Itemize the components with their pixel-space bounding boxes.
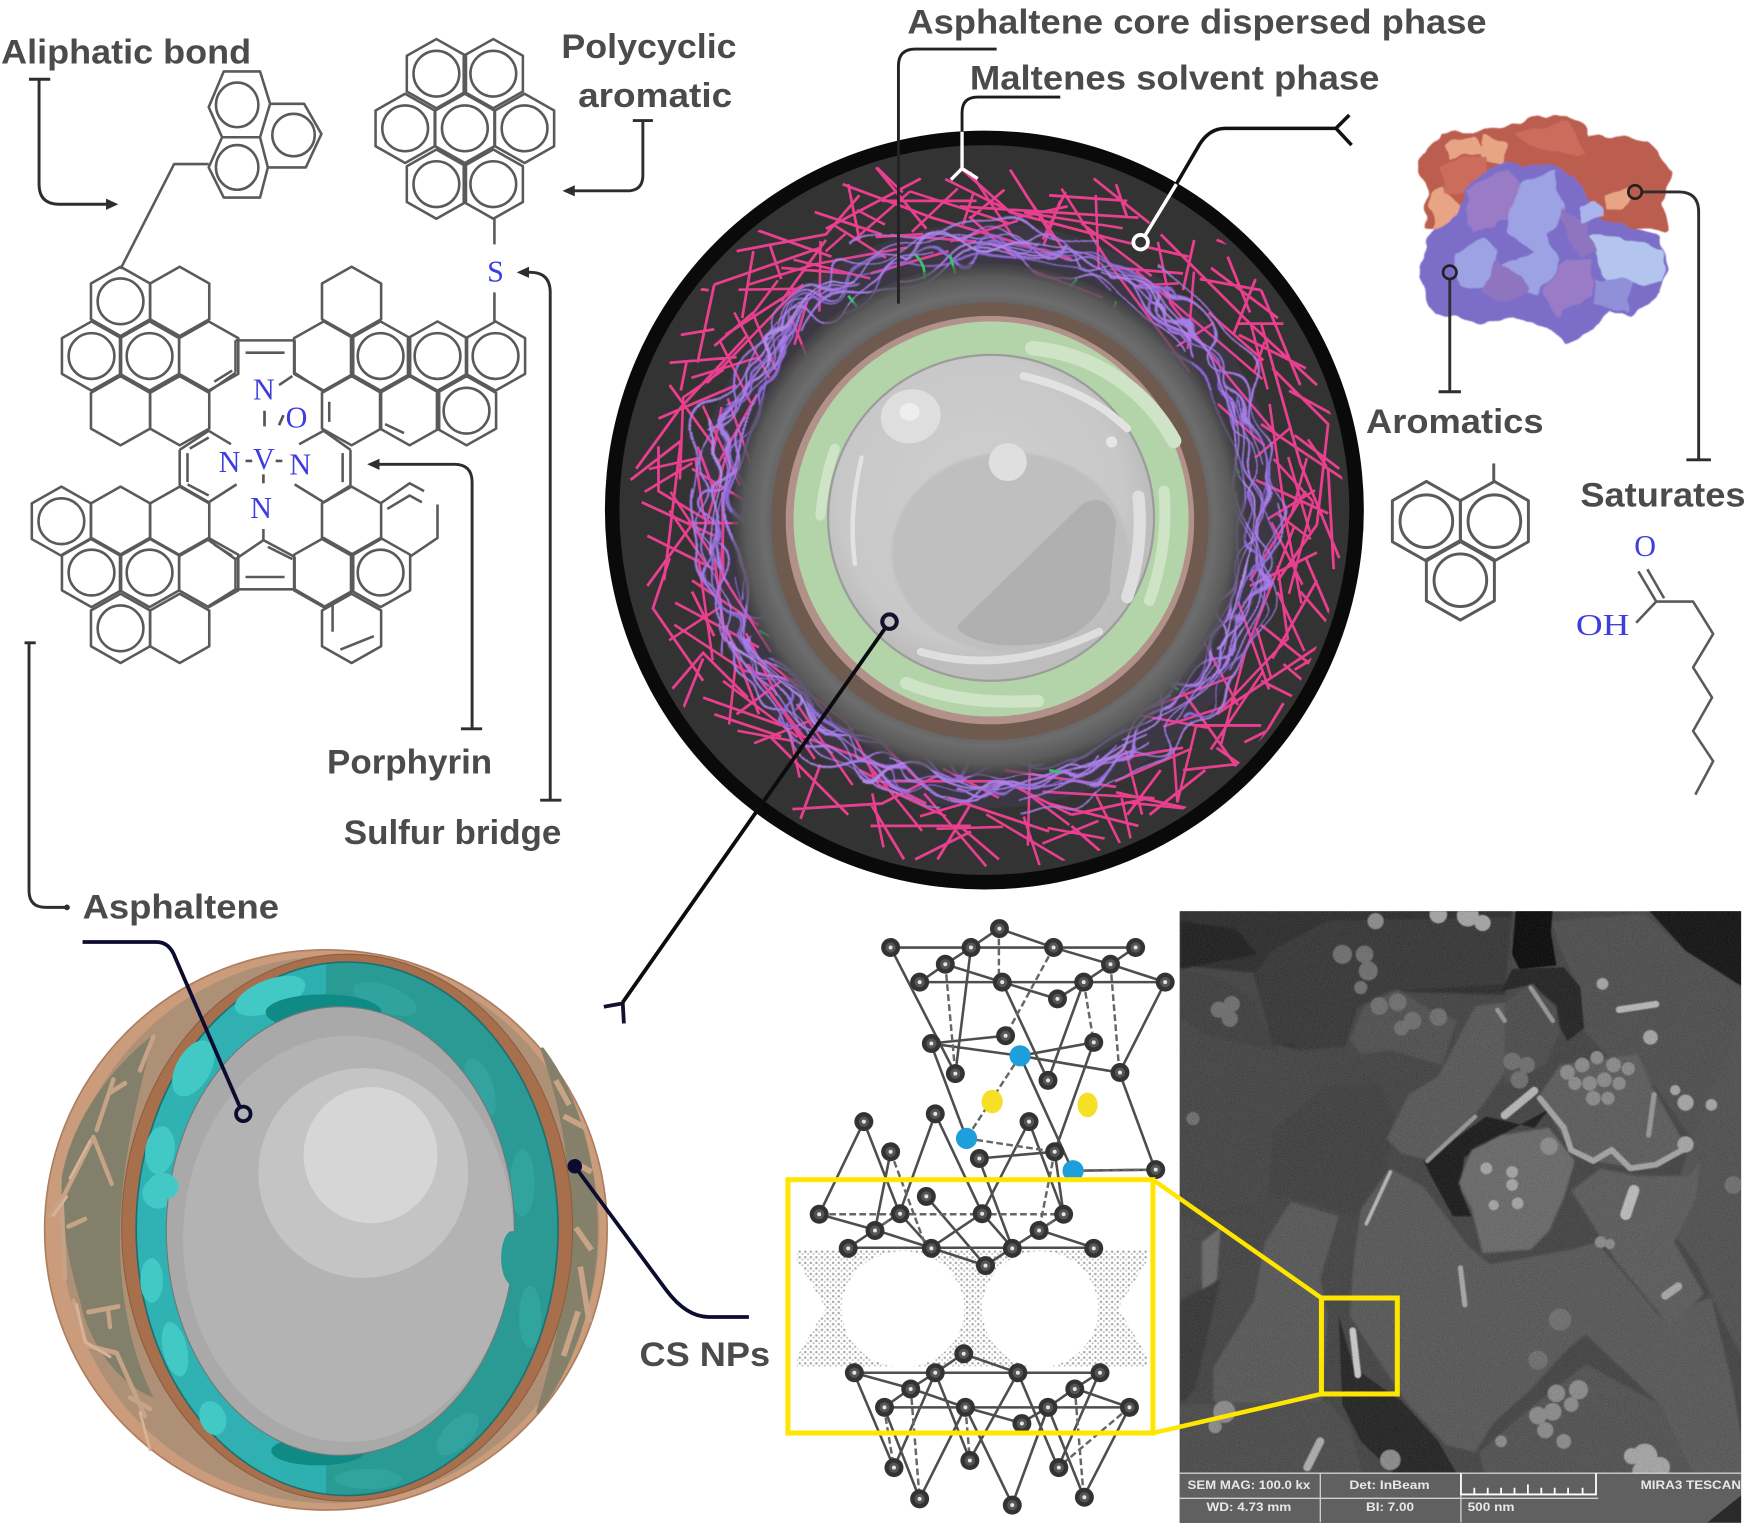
central N, V and O atom labels: O	[286, 400, 307, 434]
outer tan shell	[45, 950, 607, 1510]
dark cracks	[1339, 1109, 1549, 1480]
polycyclic aromatic ring cluster	[376, 39, 554, 219]
label: CS NPs with leader	[568, 1159, 770, 1374]
central N, V and O atom labels: N	[253, 373, 275, 407]
label: inner asphaltene leader	[83, 942, 251, 1121]
arrow: polycyclic aromatic	[571, 121, 653, 191]
purple fibres	[701, 218, 1281, 810]
yellow zoom boxes and connectors	[788, 1180, 1397, 1433]
green ring	[794, 321, 1189, 717]
molecule: asphaltene porphyrin structure	[32, 39, 554, 663]
label: CS NPs with leader: CS NPs	[640, 1336, 770, 1374]
arrow: porphyrin	[377, 464, 482, 729]
arrow: sulfur bridge	[527, 272, 561, 800]
label: Porphyrin: Porphyrin	[327, 743, 492, 781]
core highlight	[258, 1068, 468, 1278]
leader line: core dispersed phase	[898, 49, 997, 304]
white leader inside particle	[951, 132, 978, 180]
gray core	[166, 1007, 515, 1455]
large particle: asphaltene core with maltene shell	[604, 130, 1364, 890]
label: Sulfur bridge: Sulfur bridge	[344, 814, 561, 852]
label: Asphaltene core dispersed phase: Asphaltene core dispersed phase	[907, 3, 1487, 41]
leader line linking core to asphaltene particle	[604, 614, 897, 1023]
outer black shell	[605, 131, 1364, 890]
lattice atoms	[810, 919, 1175, 1515]
central N, V and O atom labels: N	[289, 447, 311, 481]
fused ring core	[32, 267, 525, 663]
label: Maltenes solvent phase: Maltenes solvent phase	[970, 59, 1379, 97]
SEM micrograph	[1180, 905, 1750, 1523]
overall darkening to match micrograph exposure	[1180, 910, 1750, 1486]
protein-like SARA blob	[1422, 117, 1670, 339]
leader line: maltenes	[962, 97, 1060, 132]
teal highlights	[140, 968, 309, 1441]
cross-section particle: asphaltene core with CS NPs shell	[45, 950, 607, 1510]
bright central and right plates	[1459, 1054, 1704, 1327]
aromatics purple lobe	[1423, 165, 1663, 339]
right olive crescent with veins	[538, 1049, 596, 1412]
molecule: saturates fatty acid chain: O	[1634, 529, 1656, 563]
aliphatic-bonded three-ring group	[121, 71, 321, 269]
inner gray sphere	[828, 355, 1154, 681]
left olive crescent with veins	[50, 1035, 153, 1450]
SEM info bar: Det: InBeam	[1349, 1478, 1430, 1492]
SEM info bar: BI: 7.00	[1366, 1500, 1414, 1514]
central N, V and O atom labels: N	[250, 491, 272, 525]
label: Polycyclic aromatic	[561, 28, 737, 196]
SEM info bar: WD: 4.73 mm	[1206, 1500, 1291, 1514]
green flecks	[759, 254, 1239, 772]
label: Maltenes solvent phase	[951, 59, 1379, 180]
lattice zoom box	[788, 1180, 1153, 1433]
central N, V and O atom labels: N	[219, 445, 241, 479]
label: Aliphatic bond: Aliphatic bond	[1, 34, 251, 72]
pink fibre network	[630, 166, 1342, 868]
teal ring	[136, 962, 558, 1496]
central N, V and O atom labels	[219, 373, 311, 525]
label: Asphaltene bracket	[25, 643, 279, 927]
lit plates	[1180, 984, 1748, 1480]
label: Aliphatic bond	[1, 34, 251, 210]
molecule: saturates fatty acid chain	[1576, 529, 1713, 795]
SEM info bar: MIRA3 TESCAN	[1641, 1478, 1741, 1492]
blue and yellow ions	[956, 1045, 1098, 1181]
dark teal inner caps	[266, 994, 382, 1030]
molecule: aromatics structure	[1392, 463, 1528, 620]
label: Saturates with leader	[1580, 185, 1746, 515]
sulfur bridge atom	[487, 219, 504, 321]
grain texture	[1180, 910, 1750, 1486]
central N, V and O atom labels: V	[253, 442, 275, 476]
bright edge contours	[1307, 988, 1689, 1467]
SEM info bar	[1180, 1473, 1741, 1523]
arrow: aliphatic bond	[29, 79, 109, 204]
gray halo ring	[732, 263, 1246, 777]
dark recess regions	[1180, 910, 1750, 1371]
black voids	[1501, 910, 1750, 1041]
label: Sulfur bridge	[344, 267, 561, 852]
thin pink ring	[786, 316, 1194, 724]
label: Aromatics with leader	[1366, 266, 1544, 441]
label: Porphyrin	[327, 459, 492, 781]
sphere shading	[892, 452, 1128, 653]
label: Aromatics with leader: Aromatics	[1366, 403, 1544, 441]
molecule: saturates fatty acid chain: OH	[1576, 608, 1629, 642]
SEM zoom box	[1321, 1298, 1397, 1394]
label: Polycyclic aromatic: Polycyclic	[561, 28, 737, 66]
label: Asphaltene bracket: Asphaltene	[83, 889, 279, 927]
SEM info bar: SEM MAG: 100.0 kx	[1188, 1478, 1310, 1492]
sulfur bridge atom: S	[487, 254, 504, 288]
stippled porous layer	[795, 1250, 1150, 1367]
lattice bonds	[819, 929, 1165, 1504]
brown rim ring	[122, 954, 573, 1501]
label: Asphaltene core dispersed phase	[898, 3, 1487, 304]
SEM info bar: 500 nm	[1468, 1500, 1515, 1514]
teal bumps	[147, 1173, 179, 1200]
sphere highlights	[853, 376, 1140, 661]
bright particle clusters	[1186, 905, 1742, 1480]
maltene dark phase	[619, 145, 1349, 875]
crystal lattice diagram	[795, 919, 1175, 1515]
saturates red lobe	[1422, 117, 1670, 229]
leader line with white circle: outer phase	[1133, 115, 1352, 249]
brown ring	[771, 302, 1209, 740]
label: Saturates with leader: Saturates	[1580, 477, 1746, 515]
connector lines	[1153, 1180, 1321, 1433]
right teal patches	[335, 975, 541, 1489]
label: Polycyclic aromatic: aromatic	[578, 77, 732, 115]
